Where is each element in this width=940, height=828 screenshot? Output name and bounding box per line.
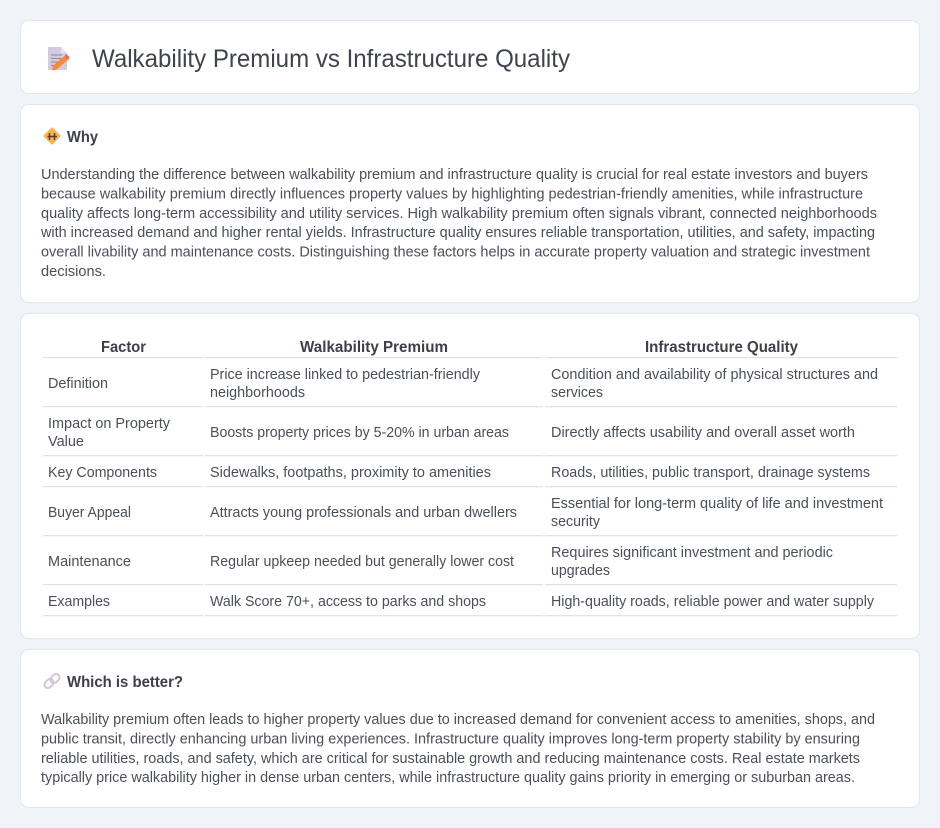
table row: buyer appeal bbox=[43, 496, 897, 536]
text block: which is better paragraph bbox=[41, 712, 875, 786]
table row: examples bbox=[43, 594, 897, 616]
text block: which is better paragraph: reliable utilities, roads, and safety, which are critical for sustainable growth and reducing maintenance costs. Real estate markets bbox=[41, 751, 860, 767]
table header row bbox=[43, 339, 897, 358]
text block: why paragraph bbox=[40, 167, 877, 280]
table row: examples: Examples bbox=[48, 594, 110, 610]
table row: impact on property value: Boosts property prices by 5-20% in urban areas bbox=[210, 425, 509, 441]
table row: maintenance bbox=[43, 545, 897, 585]
panel: title header bbox=[20, 20, 920, 94]
table row: definition: Definition bbox=[48, 376, 108, 392]
table row: buyer appeal: Attracts young professionals and urban dwellers bbox=[210, 505, 517, 521]
heading: which is better: Which is better? bbox=[67, 674, 183, 691]
panel: which is better bbox=[20, 650, 920, 808]
icon: children crossing diamond bbox=[44, 128, 60, 144]
heading: why: Why bbox=[67, 129, 98, 146]
table row: definition: services bbox=[551, 385, 603, 401]
panel: comparison table bbox=[20, 314, 920, 638]
table row: definition: neighborhoods bbox=[210, 385, 305, 401]
text block: which is better paragraph: public transit, directly enhancing urban living experiences. Infrastructure quality improves long-term property stability by ensuring bbox=[41, 732, 860, 748]
text block: which is better paragraph: typically price walkability higher in dense urban centers, while infrastructure quality gains priority in emerging or suburban areas. bbox=[41, 770, 855, 786]
table row: key components: Roads, utilities, public transport, drainage systems bbox=[551, 465, 870, 481]
table row: examples: Walk Score 70+, access to parks and shops bbox=[210, 594, 486, 610]
text block: why paragraph: decisions. bbox=[41, 264, 106, 280]
text block: why paragraph: with increased demand and higher rental yields. Infrastructure quality ensures reliable transportation, utilities, and safety, impacting bbox=[40, 225, 875, 241]
text block: why paragraph: overall livability and maintenance costs. Distinguishing these factors helps in accurate property valuation and strategic investment bbox=[41, 244, 870, 260]
text block: why paragraph: because walkability premium directly influences property values by highlighting pedestrian-friendly amenities, while infrastructure bbox=[41, 186, 863, 202]
table row: impact on property value bbox=[43, 416, 897, 456]
table row: definition bbox=[43, 367, 897, 407]
table row: key components bbox=[43, 465, 897, 487]
table row: definition: Price increase linked to pedestrian-friendly bbox=[210, 367, 481, 383]
table row: maintenance: Requires significant investment and periodic bbox=[551, 545, 833, 561]
title: Walkability Premium vs Infrastructure Quality bbox=[92, 45, 570, 73]
table row: buyer appeal: security bbox=[551, 514, 601, 530]
text block: why paragraph: Understanding the difference between walkability premium and infrastructure quality is crucial for real estate investors and buyers bbox=[41, 167, 868, 183]
panel: why bbox=[20, 104, 920, 302]
table header row: Infrastructure Quality bbox=[645, 339, 798, 356]
table header row: Factor bbox=[101, 339, 146, 356]
table row: buyer appeal: Essential for long-term quality of life and investment bbox=[551, 496, 883, 512]
text block: which is better paragraph: Walkability premium often leads to higher property values due to increased demand for convenient access to amenities, shops, and bbox=[41, 712, 875, 728]
table row: examples: High-quality roads, reliable power and water supply bbox=[551, 594, 875, 610]
table row: key components: Sidewalks, footpaths, proximity to amenities bbox=[210, 465, 491, 481]
table row: impact on property value: Value bbox=[48, 434, 84, 450]
table row: key components: Key Components bbox=[48, 465, 157, 481]
table row: buyer appeal: Buyer Appeal bbox=[48, 505, 131, 521]
icon: link bbox=[43, 672, 61, 690]
table row: impact on property value: Impact on Property bbox=[48, 416, 171, 432]
text block: why paragraph: quality affects long-term accessibility and utility services. High walkability premium often signals vibrant, connected neighborhoods bbox=[41, 206, 877, 222]
table row: maintenance: Regular upkeep needed but generally lower cost bbox=[210, 554, 514, 570]
icon: memo with pencil bbox=[48, 47, 70, 70]
table row: impact on property value: Directly affects usability and overall asset worth bbox=[551, 425, 855, 441]
table row: maintenance: upgrades bbox=[551, 563, 610, 579]
table row: definition: Condition and availability of physical structures and bbox=[551, 367, 878, 383]
table row: maintenance: Maintenance bbox=[48, 554, 131, 570]
table header row: Walkability Premium bbox=[300, 339, 448, 356]
